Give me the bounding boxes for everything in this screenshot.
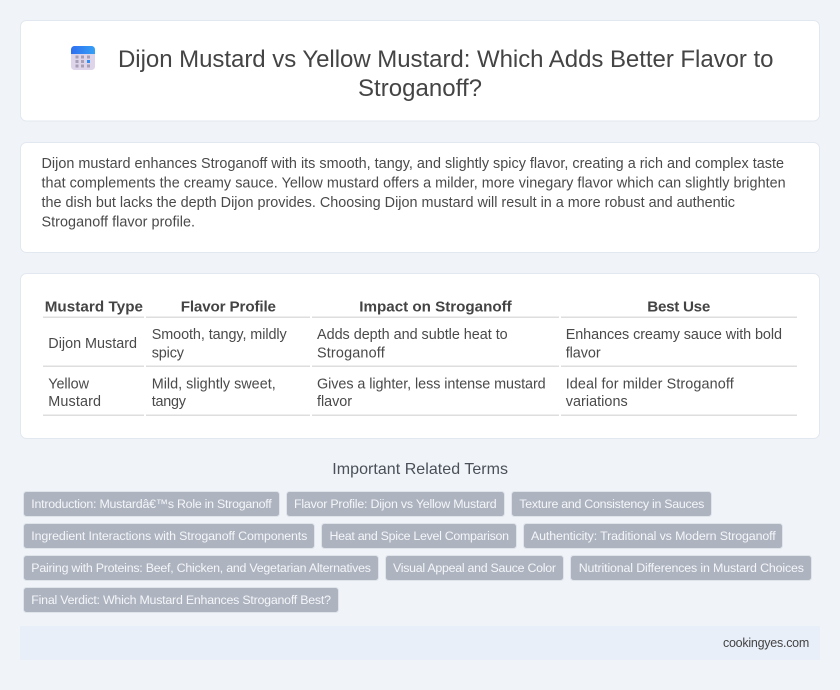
icon: calendar (71, 46, 95, 70)
table row: Yellow Mustard: flavor (317, 394, 352, 410)
title: Stroganoff? (358, 75, 482, 102)
tag (24, 524, 314, 548)
panel: title header (20, 20, 820, 121)
table header row: Impact on Stroganoff (359, 298, 513, 316)
footer (20, 626, 820, 660)
table row: Yellow Mustard: Mustard (48, 394, 101, 410)
text block: description paragraph: Stroganoff flavor profile. (42, 214, 195, 230)
panel: description (20, 142, 820, 252)
table row: Dijon Mustard: spicy (152, 345, 185, 361)
table row: Dijon Mustard: flavor (566, 345, 601, 361)
table row: Yellow Mustard: Mild, slightly sweet, (152, 376, 276, 392)
table row: Dijon Mustard: Adds depth and subtle heat to (317, 327, 508, 343)
footer: cookingyes.com (723, 636, 809, 650)
heading: important related terms: Important Related Terms (332, 461, 508, 478)
text block: description paragraph: that complements the creamy sauce. Yellow mustard offers a milder, more vinegary flavor which can slightly brighten (42, 176, 786, 192)
tag: Visual Appeal and Sauce Color (393, 561, 556, 575)
panel: comparison table (20, 274, 820, 438)
tag: Flavor Profile: Dijon vs Yellow Mustard (294, 497, 497, 511)
tag: Pairing with Proteins: Beef, Chicken, and Vegetarian Alternatives (31, 561, 371, 575)
text block: description paragraph: the dish but lacks the depth Dijon provides. Choosing Dijon mustard will result in a more robust and authentic (42, 195, 735, 211)
table row: Dijon Mustard: Stroganoff (317, 345, 386, 361)
tag: Heat and Spice Level Comparison (330, 529, 509, 543)
text block: description paragraph (42, 156, 786, 230)
table header row: Flavor Profile (181, 298, 276, 316)
table row: Yellow Mustard: tangy (152, 394, 187, 410)
table row: Yellow Mustard: Yellow (48, 376, 90, 392)
tag: Ingredient Interactions with Stroganoff Components (31, 529, 307, 543)
table row: Yellow Mustard: Gives a lighter, less intense mustard (317, 376, 546, 392)
tag (386, 556, 564, 580)
tag: Final Verdict: Which Mustard Enhances Stroganoff Best? (31, 593, 331, 607)
tag (570, 556, 812, 580)
tag: Texture and Consistency in Sauces (519, 497, 704, 511)
table row: Dijon Mustard: Enhances creamy sauce with bold (566, 327, 782, 343)
tag (512, 492, 712, 516)
tag (286, 492, 504, 516)
table header row: Best Use (647, 298, 710, 316)
text block: description paragraph: Dijon mustard enhances Stroganoff with its smooth, tangy, and slightly spicy flavor, creating a rich and complex taste (42, 156, 784, 172)
tag: Nutritional Differences in Mustard Choices (579, 561, 804, 575)
tag: Introduction: Mustardâ€™s Role in Stroganoff (31, 497, 272, 511)
tag list: related terms (24, 492, 812, 612)
tag (24, 588, 338, 612)
tag (24, 556, 378, 580)
table header row: Mustard Type (45, 298, 143, 316)
table row: Dijon Mustard: Dijon Mustard (48, 336, 137, 352)
table row: Yellow Mustard: Ideal for milder Stroganoff (566, 376, 735, 392)
table row: Dijon Mustard (48, 327, 782, 361)
tag (322, 524, 516, 548)
table row: Yellow Mustard: variations (566, 394, 628, 410)
title (118, 46, 774, 102)
tag: Authenticity: Traditional vs Modern Stroganoff (531, 529, 776, 543)
table row: Yellow Mustard (48, 376, 735, 410)
tag (524, 524, 782, 548)
tag (24, 492, 280, 516)
table row: Dijon Mustard: Smooth, tangy, mildly (152, 327, 287, 343)
table header row (45, 298, 710, 316)
title: Dijon Mustard vs Yellow Mustard: Which Adds Better Flavor to (118, 46, 774, 73)
